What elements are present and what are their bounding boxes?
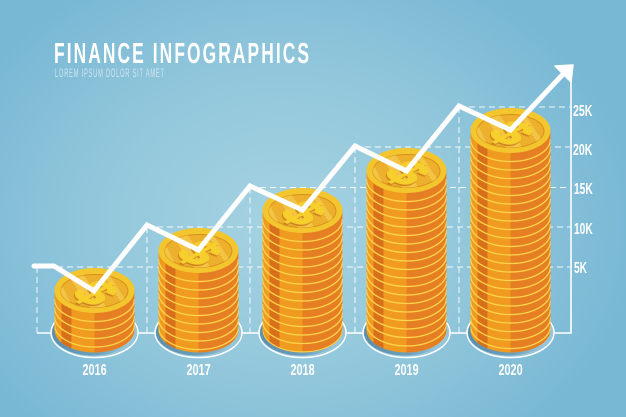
- chart axes: [37, 70, 571, 333]
- subtitle: LOREM IPSUM DOLOR SIT AMET: [55, 67, 164, 80]
- year labels: [82, 361, 523, 378]
- axis labels: 20K: [573, 141, 593, 159]
- title: FINANCE INFOGRAPHICS: [54, 38, 309, 70]
- coin stack 2016: $: [60, 273, 131, 313]
- coin stack 2016: $: [59, 275, 130, 314]
- year labels: 2020: [498, 361, 523, 378]
- coin stack 2017: $: [164, 233, 235, 273]
- coin stack 2019: $: [371, 155, 442, 194]
- year labels: 2017: [186, 361, 211, 378]
- coin stack 2018: $: [267, 195, 338, 234]
- coin stack 2020: [467, 108, 554, 360]
- axis labels: 10K: [574, 220, 593, 238]
- coin stack 2017: $: [163, 235, 234, 274]
- axis labels: 15K: [574, 180, 593, 198]
- axis labels: 5K: [574, 259, 587, 277]
- coin stack 2018: [259, 188, 346, 360]
- growth arrow: [34, 65, 573, 291]
- coin stack 2017: [155, 228, 242, 360]
- coin stack 2016: [51, 268, 138, 360]
- dashed grid: [37, 107, 570, 333]
- coin stack 2019: $: [372, 153, 443, 193]
- coin stack 2019: [363, 148, 450, 360]
- axis labels: 25K: [573, 102, 593, 120]
- year labels: 2019: [394, 361, 419, 378]
- coin stack 2020: $: [475, 115, 546, 154]
- axis labels: [573, 102, 593, 277]
- coin stack 2018: $: [268, 193, 339, 233]
- year labels: 2018: [290, 361, 315, 378]
- coin stack 2020: $: [476, 113, 547, 153]
- year labels: 2016: [82, 361, 107, 378]
